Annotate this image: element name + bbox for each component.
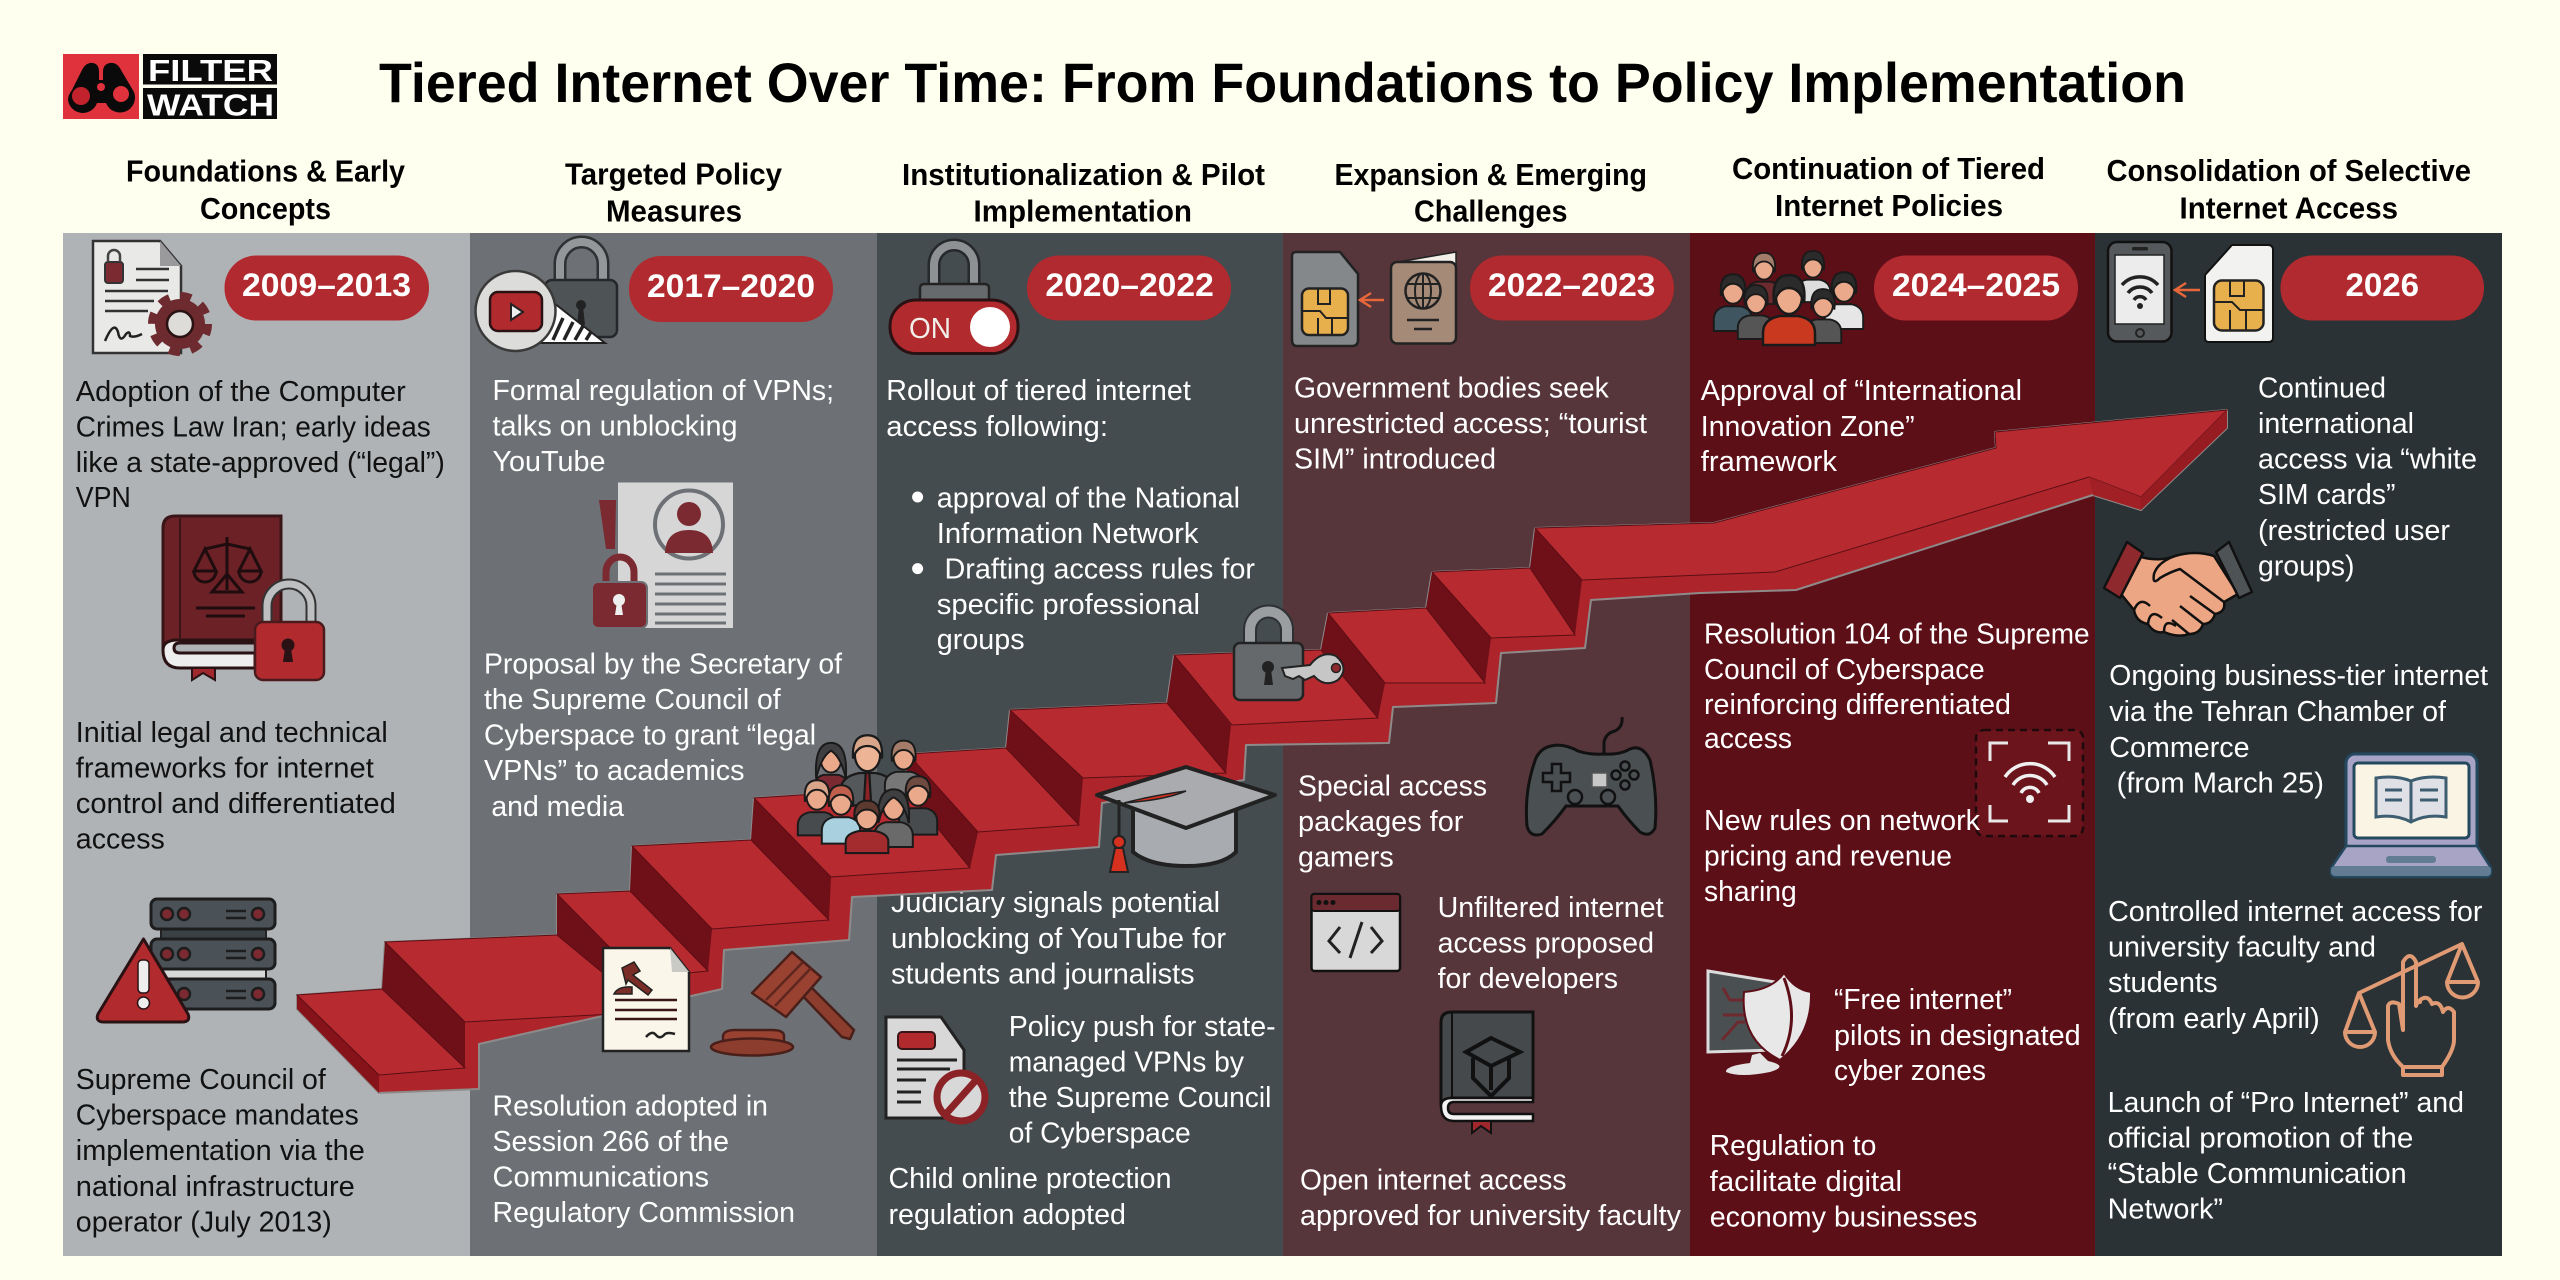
date pill 2020-2022: 2020–2022 <box>1045 267 1214 303</box>
text block: initial frameworks: Initial legal and technical <box>76 717 388 749</box>
icon: document with prohibition sign <box>886 1017 985 1121</box>
heading: Continuation of Tiered Internet Policies: Continuation of Tiered <box>1732 151 2045 186</box>
panel: 2026 <box>2095 233 2502 1256</box>
text block: network pricing: pricing and revenue <box>1704 841 1952 873</box>
heading: Expansion & Emerging Challenges <box>1334 157 1647 228</box>
text block: gamers <box>1298 770 1487 874</box>
text block: developers: Unfiltered internet <box>1438 892 1664 924</box>
text block: government bodies: unrestricted access; “tourist <box>1294 408 1647 440</box>
text block: state-managed VPNs: managed VPNs by <box>1009 1046 1244 1078</box>
panel: 2017-2020 <box>470 233 877 1256</box>
text block: initial frameworks <box>76 717 396 856</box>
heading: Targeted Policy Measures <box>565 156 783 228</box>
text block: Pro Internet launch <box>2108 1087 2464 1226</box>
icon: padlock and key <box>1234 612 1344 700</box>
date pill 2009-2013 <box>224 256 429 320</box>
date pill 2024-2025: 2024–2025 <box>1892 267 2060 303</box>
text block: initial frameworks: access <box>76 824 165 856</box>
icon: laptop with book <box>2331 754 2491 877</box>
text block: government bodies: SIM” introduced <box>1294 444 1496 476</box>
text block: rollout of tiered internet <box>886 375 1255 656</box>
icon: group of people <box>1714 251 1863 345</box>
text block: child online protection <box>888 1163 1172 1231</box>
text block: Computer Crimes Law <box>76 376 445 514</box>
text block: VPN regulation: YouTube <box>492 446 606 478</box>
icon: code window <box>1312 894 1400 971</box>
text block: initial frameworks: frameworks for internet <box>76 752 374 784</box>
date pill 2024-2025 <box>1874 256 2078 320</box>
icon: court document <box>603 948 689 1051</box>
text block: university faculty: approved for university faculty <box>1300 1200 1681 1232</box>
heading: Institutionalization & Pilot Implementation: Implementation <box>974 194 1192 228</box>
text block: Computer Crimes Law: like a state-approved (“legal”) <box>76 447 445 479</box>
heading: Targeted Policy Measures: Targeted Policy <box>565 156 783 192</box>
text block: judiciary signals <box>891 887 1226 990</box>
text block: gamers: packages for <box>1298 806 1464 838</box>
text block: developers: access proposed <box>1438 928 1654 960</box>
text block: International Innovation Zone <box>1701 375 2022 478</box>
heading: Foundations & Early Concepts: Concepts <box>200 191 331 226</box>
text block: Computer Crimes Law: VPN <box>76 482 131 514</box>
staircase arrow rising through the timeline <box>297 410 2227 1093</box>
text block: white SIM cards: international <box>2258 408 2414 440</box>
text block: Supreme Council mandate: national infrastructure <box>76 1171 355 1203</box>
text block: state-managed VPNs: of Cyberspace <box>1009 1118 1191 1150</box>
icon: monitor with shield <box>1708 971 1811 1075</box>
text block: legal VPN proposal: Cyberspace to grant “legal <box>484 720 816 752</box>
text block: VPN regulation: Formal regulation of VPNs; <box>492 375 834 407</box>
text block: state-managed VPNs <box>1009 1011 1276 1150</box>
text block: government bodies <box>1294 373 1647 476</box>
date pill 2026: 2026 <box>2346 267 2419 303</box>
icon: law book with padlock <box>163 516 324 680</box>
text block: rollout of tiered internet: access following: <box>886 411 1108 443</box>
date pill 2022-2023: 2022–2023 <box>1488 267 1655 303</box>
text block: legal VPN proposal: and media <box>491 791 625 823</box>
text block: university faculty access <box>2108 896 2483 1035</box>
panel: 2024-2025 <box>1690 233 2095 1256</box>
text block: free internet pilots: cyber zones <box>1834 1055 1986 1087</box>
text block: Session 266 resolution: Session 266 of the <box>492 1126 729 1158</box>
panel: 2020-2022 <box>877 233 1283 1256</box>
text block: white SIM cards: Continued <box>2258 373 2386 405</box>
icon: phone and white SIM <box>2108 242 2273 342</box>
text block: legal VPN proposal <box>484 648 843 823</box>
text block: network pricing: New rules on network <box>1704 805 1980 837</box>
text block: university faculty <box>1300 1164 1681 1232</box>
text block: Pro Internet launch: official promotion of the <box>2108 1123 2413 1155</box>
text block: Resolution 104 <box>1704 619 2090 755</box>
text block: rollout of tiered internet: Drafting access rules for <box>944 554 1255 586</box>
date pill 2022-2023 <box>1470 256 1674 320</box>
text block: child online protection: regulation adopted <box>888 1199 1126 1231</box>
text block: university faculty access: (from early April) <box>2108 1003 2320 1035</box>
heading: Consolidation of Selective Internet Access: Internet Access <box>2180 190 2398 226</box>
text block: Supreme Council mandate: implementation via the <box>76 1135 365 1167</box>
text block: white SIM cards: SIM cards” <box>2258 479 2396 511</box>
text block: free internet pilots <box>1834 984 2081 1087</box>
text block: rollout of tiered internet: specific professional <box>937 589 1200 621</box>
icon: gavel <box>711 952 854 1056</box>
text block: International Innovation Zone: framework <box>1701 446 1838 478</box>
icon: YouTube and padlock <box>476 242 617 351</box>
date pill 2017-2020: 2017–2020 <box>647 268 815 304</box>
text block: Resolution 104: Council of Cyberspace <box>1704 654 1985 686</box>
text block: rollout of tiered internet: groups <box>937 624 1025 656</box>
heading: Expansion & Emerging Challenges: Expansion & Emerging <box>1334 157 1647 192</box>
text block: Supreme Council mandate: operator (July 2013) <box>76 1206 332 1238</box>
icon: server stack with warning <box>97 899 275 1022</box>
text block: Pro Internet launch: “Stable Communication <box>2108 1158 2407 1190</box>
text block: legal VPN proposal: VPNs” to academics <box>484 755 744 787</box>
text block: Session 266 resolution: Communications <box>492 1162 709 1194</box>
text block: initial frameworks: control and differentiated <box>76 788 396 820</box>
logo: Filter Watch: WATCH <box>147 88 274 122</box>
icon: book with graduation crest <box>1441 1012 1533 1133</box>
icon: padlock with ON switch: ON <box>909 313 951 345</box>
text block: state-managed VPNs: the Supreme Council <box>1009 1082 1271 1114</box>
text block: digital economy: facilitate digital <box>1710 1166 1902 1198</box>
text block: judiciary signals: Judiciary signals potential <box>891 887 1220 919</box>
date pill 2009-2013: 2009–2013 <box>242 267 411 303</box>
text block: gamers: gamers <box>1298 842 1394 874</box>
logo: Filter Watch: FILTER <box>148 53 273 88</box>
date pill 2017-2020 <box>629 256 833 322</box>
icon: legal document with gear <box>93 241 208 353</box>
text block: network pricing <box>1704 805 1980 908</box>
text block: digital economy <box>1710 1130 1977 1234</box>
text block: Supreme Council mandate: Cyberspace mandates <box>76 1100 359 1132</box>
icon: padlock with ON switch <box>890 245 1018 354</box>
text block: business-tier internet: (from March 25) <box>2117 768 2324 800</box>
text block: developers: for developers <box>1438 963 1618 995</box>
text block: university faculty: Open internet access <box>1300 1164 1566 1196</box>
text block: judiciary signals: students and journalists <box>891 958 1195 990</box>
icon: tourist SIM and passport <box>1292 252 1456 346</box>
text block: legal VPN proposal: the Supreme Council of <box>484 684 782 716</box>
text block: business-tier internet: Ongoing business-tier internet <box>2109 660 2488 692</box>
text block: university faculty access: students <box>2108 967 2218 999</box>
text block: network pricing: sharing <box>1704 876 1797 908</box>
text block: rollout of tiered internet: Information Network <box>937 518 1199 550</box>
date pill 2026 <box>2280 256 2484 320</box>
logo: Filter Watch <box>63 53 277 122</box>
icon: handshake <box>2104 542 2252 636</box>
icon: wifi focus frame <box>1976 730 2083 836</box>
text block: state-managed VPNs: Policy push for state- <box>1009 1011 1276 1043</box>
text block: white SIM cards: groups) <box>2258 550 2354 582</box>
text block: white SIM cards <box>2258 373 2477 582</box>
icon: game controller <box>1526 717 1656 835</box>
text block: rollout of tiered internet: approval of the National <box>937 482 1240 514</box>
text block: gamers: Special access <box>1298 770 1487 802</box>
text block: university faculty access: Controlled internet access for <box>2108 896 2483 928</box>
text block: Resolution 104: access <box>1704 723 1792 755</box>
heading: Continuation of Tiered Internet Policies <box>1732 151 2045 223</box>
text block: free internet pilots: “Free internet” <box>1834 984 2012 1016</box>
text block: Session 266 resolution <box>492 1090 795 1229</box>
text block: Session 266 resolution: Regulatory Commission <box>492 1197 795 1229</box>
text block: Resolution 104: reinforcing differentiated <box>1704 689 2011 721</box>
icon: graduation cap <box>1097 767 1275 872</box>
heading: Consolidation of Selective Internet Access: Consolidation of Selective <box>2106 153 2471 188</box>
icon: hand on scales <box>2345 944 2478 1075</box>
heading: Foundations & Early Concepts <box>126 154 406 226</box>
text block: Resolution 104: Resolution 104 of the Supreme <box>1704 619 2090 651</box>
text block: Supreme Council mandate <box>76 1064 365 1238</box>
text block: International Innovation Zone: Approval of “International <box>1701 375 2022 407</box>
text block: white SIM cards: (restricted user <box>2258 515 2450 547</box>
text block: business-tier internet <box>2109 660 2488 800</box>
heading: Foundations & Early Concepts: Foundations & Early <box>126 154 406 188</box>
text block: business-tier internet: Commerce <box>2109 732 2250 764</box>
text block: government bodies: Government bodies seek <box>1294 373 1609 405</box>
text block: child online protection: Child online protection <box>888 1163 1172 1195</box>
icon: group of people on the steps <box>798 735 937 853</box>
title: Tiered Internet Over Time: From Foundations to Policy Implementation <box>379 51 2186 114</box>
heading: Continuation of Tiered Internet Policies: Internet Policies <box>1775 188 2003 223</box>
text block: business-tier internet: via the Tehran Chamber of <box>2109 696 2447 728</box>
text block: Pro Internet launch: Network” <box>2108 1194 2223 1226</box>
text block: Computer Crimes Law: Crimes Law Iran; early ideas <box>76 412 431 444</box>
silhouette <box>297 410 2227 1093</box>
text block: digital economy: economy businesses <box>1710 1202 1977 1234</box>
text block: International Innovation Zone: Innovation Zone” <box>1701 411 1915 443</box>
text block: rollout of tiered internet: Rollout of tiered internet <box>886 375 1191 407</box>
text block: legal VPN proposal: Proposal by the Secretary of <box>484 648 843 680</box>
text block: white SIM cards: access via “white <box>2258 444 2477 476</box>
text block: Computer Crimes Law: Adoption of the Computer <box>76 376 406 408</box>
heading: Institutionalization & Pilot Implementation <box>902 157 1265 228</box>
heading: Institutionalization & Pilot Implementation: Institutionalization & Pilot <box>902 157 1265 192</box>
icon: personal record with lock <box>592 482 733 628</box>
text block: developers <box>1438 892 1664 995</box>
heading: Targeted Policy Measures: Measures <box>606 194 742 228</box>
text block: free internet pilots: pilots in designated <box>1834 1020 2081 1052</box>
heading: Expansion & Emerging Challenges: Challenges <box>1414 194 1568 228</box>
panel: 2022-2023 <box>1283 233 1690 1256</box>
text block: digital economy: Regulation to <box>1710 1130 1876 1162</box>
panel: 2009-2013 <box>63 233 470 1256</box>
heading: Consolidation of Selective Internet Access <box>2106 153 2471 226</box>
text block: Pro Internet launch: Launch of “Pro Internet” and <box>2108 1087 2464 1119</box>
date pill 2020-2022 <box>1027 256 1231 320</box>
text block: VPN regulation: talks on unblocking <box>492 410 738 442</box>
text block: university faculty access: university faculty and <box>2108 931 2376 963</box>
text block: VPN regulation <box>492 375 834 478</box>
text block: judiciary signals: unblocking of YouTube for <box>891 923 1226 955</box>
text block: Supreme Council mandate: Supreme Council of <box>76 1064 327 1096</box>
text block: Session 266 resolution: Resolution adopted in <box>492 1090 768 1122</box>
